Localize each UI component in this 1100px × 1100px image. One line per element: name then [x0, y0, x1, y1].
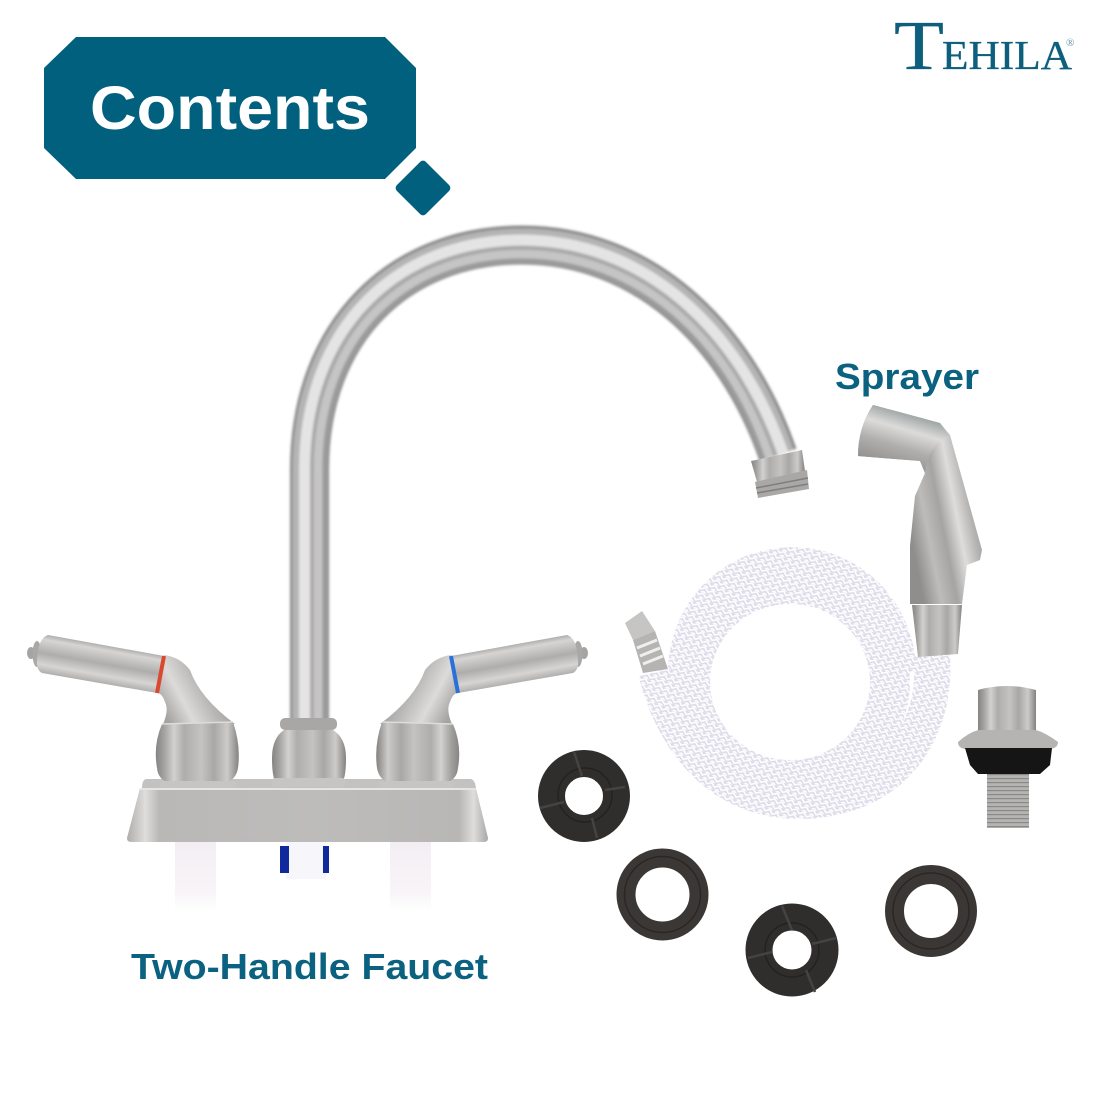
label: Two-Handle Faucet: Two-Handle Faucet: [131, 946, 488, 987]
logo: Tehila: [894, 8, 1074, 85]
deck plate: [127, 778, 488, 842]
heading: Contents: Contents: [90, 74, 370, 142]
sprayer head: [858, 405, 982, 657]
logo: Tehila: ®: [1066, 37, 1074, 49]
left hot handle: [27, 635, 239, 788]
ring washer 4: [893, 873, 969, 949]
split washer 1: [540, 752, 625, 838]
hose connector: [625, 611, 668, 673]
sprayer mount: [958, 686, 1058, 828]
logo: Tehila: T: [894, 8, 944, 85]
two-handle faucet: [27, 240, 809, 910]
logo: Tehila: EHILA: [942, 32, 1072, 78]
ring washer 2: [624, 856, 700, 932]
label: Sprayer: Sprayer: [835, 356, 979, 397]
center bonnet: [272, 718, 346, 787]
stems below the deck: [175, 842, 431, 910]
decorative diamond icon: [394, 159, 452, 217]
title banner: Contents: [44, 37, 416, 179]
spout nozzle: [751, 450, 809, 498]
right cold handle: [376, 635, 588, 788]
gooseneck spout: [304, 240, 783, 722]
sprayer collar: [912, 605, 962, 657]
braided hose: [625, 567, 932, 801]
split washer 3: [748, 906, 836, 992]
